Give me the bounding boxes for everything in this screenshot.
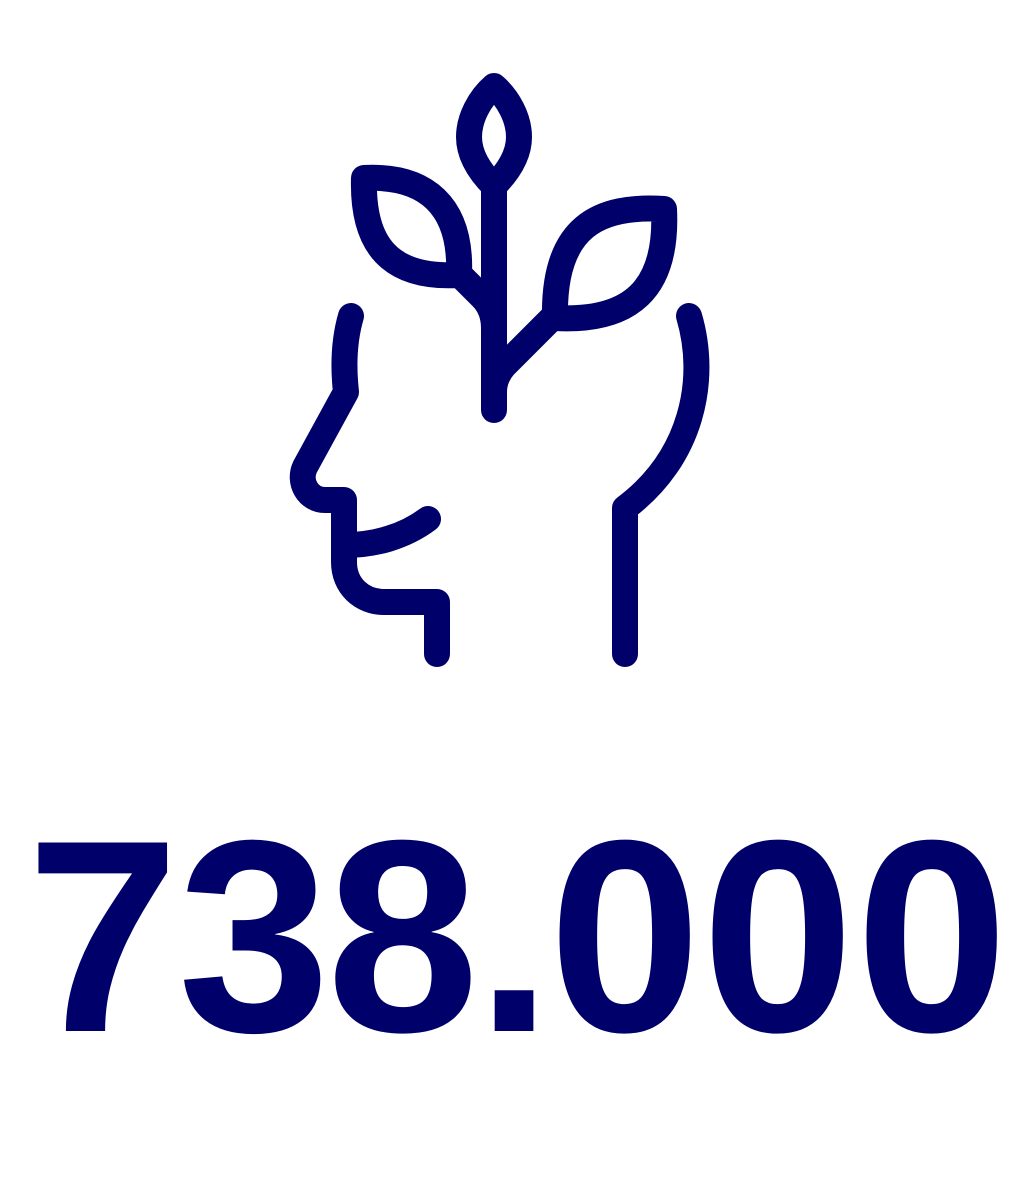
icon part: stem: [481, 180, 507, 410]
icon part: right branch: [494, 318, 552, 392]
icon part: top leaf: [469, 86, 519, 186]
big number: 738.000: [27, 784, 1008, 1090]
icon part: mouth: [346, 519, 428, 545]
icon part: left branch: [460, 275, 494, 328]
icon part: back of head: [625, 316, 696, 654]
icon: head with growing plant: [303, 86, 696, 654]
icon part: left leaf: [364, 178, 459, 275]
icon part: right leaf: [555, 209, 664, 318]
icon part: face profile: [303, 316, 437, 654]
